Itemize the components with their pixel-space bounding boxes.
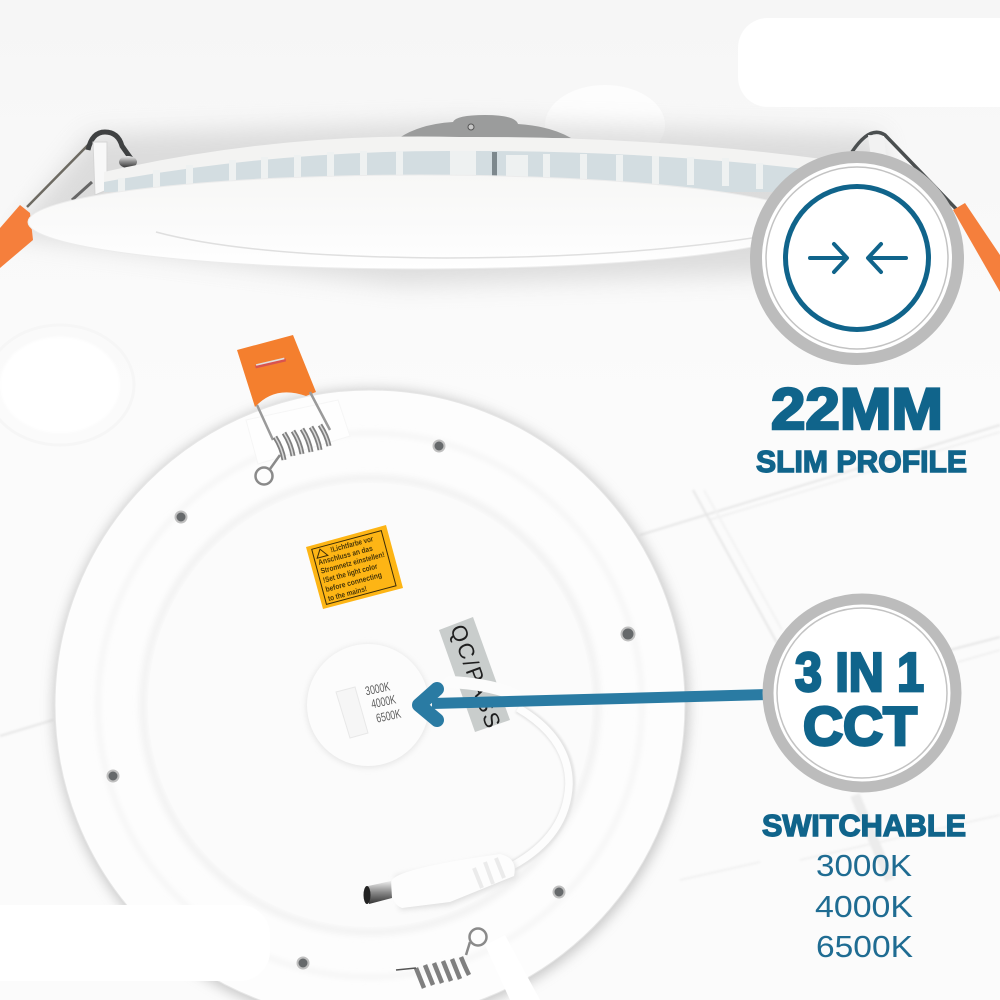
bottom edge tab [485, 935, 540, 1000]
mounting bracket [399, 115, 571, 138]
warning label: to the mains! [327, 584, 368, 603]
top edge tab [246, 400, 350, 464]
colour temperature list [815, 848, 913, 964]
CCT selector cap: 6500K [375, 707, 403, 726]
warning label: Stromnetz einstellen! [320, 550, 386, 576]
round panel back view [53, 335, 689, 1000]
left spring clip [0, 132, 137, 268]
CCT selector cap: 3000K [364, 679, 392, 698]
white blank box top right [738, 18, 1000, 107]
warning label: Anschluss an das [317, 544, 374, 567]
panel side shadow [10, 122, 900, 285]
CCT selector cap [306, 644, 430, 768]
warning label [306, 525, 403, 609]
panel back disc [55, 390, 685, 1000]
colour temperature list: 3000K [816, 848, 912, 883]
colour temperature list: 6500K [816, 929, 913, 964]
badge: 3 in 1 CCT [768, 599, 956, 787]
right spring clip [852, 132, 1000, 292]
inner disc [148, 483, 592, 927]
colour temperature list: 4000K [815, 889, 913, 924]
CCT selector cap: 4000K [370, 692, 398, 711]
warning label: before connecting [324, 570, 383, 594]
warning label: !Set the light color [322, 562, 378, 585]
badge: 3 in 1 CCT: CCT [803, 695, 917, 757]
panel back shadow [53, 389, 689, 1000]
badge: slim icon [756, 157, 958, 359]
slim panel side view [0, 115, 1000, 292]
white blank box bottom left [0, 905, 270, 981]
panel body [28, 175, 812, 269]
recessed rings [98, 433, 642, 977]
screws [108, 440, 634, 968]
orange spring tab [237, 335, 330, 484]
rim and heat-sink ribs [104, 136, 830, 192]
subheading: switchable: SWITCHABLE [762, 808, 966, 843]
badge: 3 in 1 CCT: 3 IN 1 [795, 641, 924, 703]
arrow to CCT switch [419, 689, 770, 720]
subheading: slim profile: SLIM PROFILE [756, 444, 967, 479]
heading: 22MM: 22MM [771, 377, 943, 442]
cable [450, 682, 570, 866]
icon: arrows pointing inward [786, 186, 928, 330]
DC connector [364, 854, 517, 910]
warning label: !Lichtfarbe vor [329, 534, 374, 554]
lower spring [396, 928, 486, 988]
QC/PASS label: QC/PASS [445, 621, 506, 731]
